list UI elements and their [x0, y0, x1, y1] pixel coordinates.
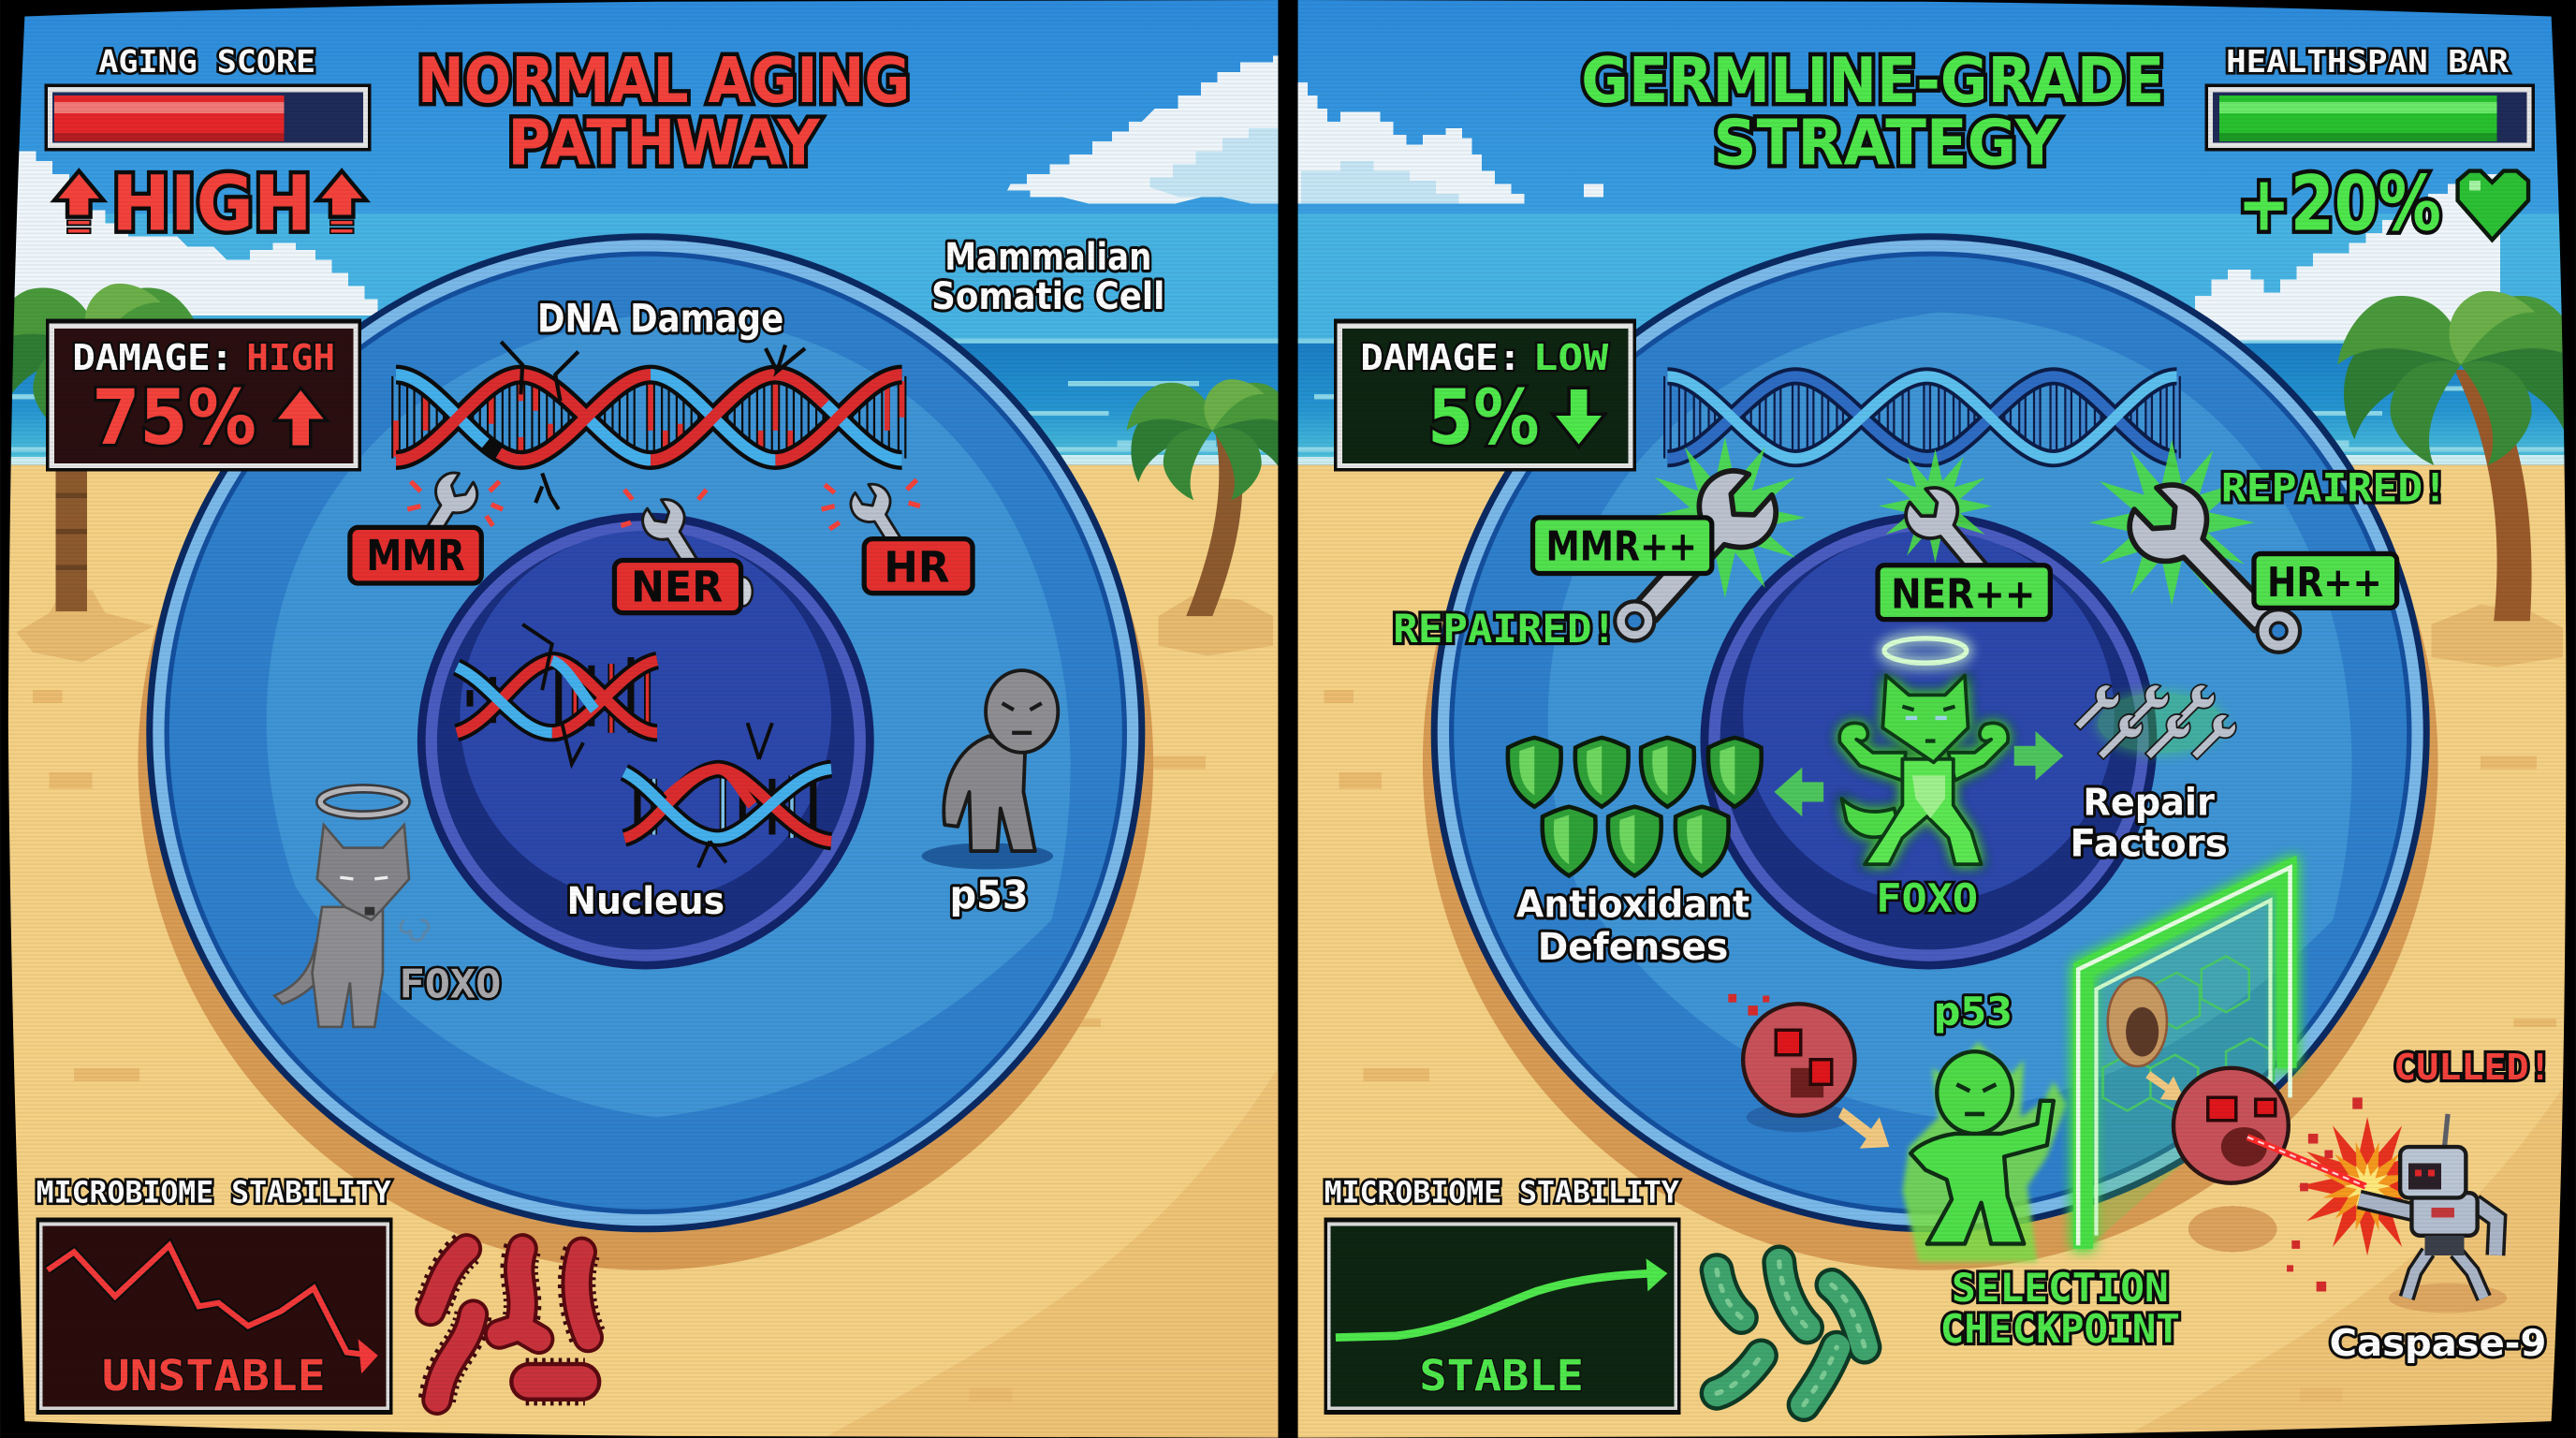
label: hr — [864, 539, 973, 594]
icon: left palm tree behind damage panel — [0, 269, 212, 662]
icon: arrow to antioxidants — [1774, 768, 1823, 816]
panel: somatic cell right — [1423, 233, 2438, 1270]
icon: wrench mmr strong — [1615, 458, 1790, 640]
character: caspase-9 robot — [2359, 1114, 2507, 1313]
icon: wrench ner weak — [621, 490, 753, 607]
label: selection checkpoint: CHECKPOINT — [1940, 1306, 2180, 1352]
chart: unstable microbiome: UNSTABLE — [102, 1351, 326, 1401]
heading: normal aging pathway: NORMAL AGING — [417, 44, 910, 117]
label: dna damage: DNA Damage — [537, 296, 783, 342]
icon: caspase laser beam — [2247, 1137, 2365, 1186]
label: foxo green: FOXO — [1876, 875, 1978, 921]
label: antioxidant defenses: Defenses — [1538, 925, 1728, 969]
heading: normal aging pathway — [417, 44, 910, 180]
high indicator with arrows — [54, 161, 366, 249]
nucleus right — [1701, 513, 2157, 969]
heading: normal aging pathway: PATHWAY — [507, 107, 820, 180]
icon: green repair burst ner — [1879, 449, 1992, 563]
icon: wrench hr weak — [822, 478, 924, 572]
label: repaired upper: REPAIRED! — [2221, 464, 2448, 510]
healthspan meter — [2204, 43, 2535, 151]
character: grey exhausted p53 — [922, 670, 1058, 869]
aging score meter: AGING SCORE — [98, 43, 315, 80]
damage panel right: DAMAGE: — [1360, 337, 1521, 379]
icon: selection checkpoint gate — [2078, 868, 2291, 1249]
icon: palm tree right of left cell — [1127, 379, 1279, 655]
label: ner: NER — [631, 562, 723, 611]
label: ner++: NER++ — [1891, 570, 2036, 618]
icon: culled cell ghost — [2108, 977, 2167, 1066]
shadow on sand below blocked cell — [2188, 1206, 2277, 1252]
damage panel right — [1334, 318, 1636, 472]
damage panel left: 75% — [92, 374, 256, 462]
icon: repair factor wrenches — [2069, 681, 2240, 765]
chart: broken dna inside nucleus lower — [624, 723, 831, 868]
icon: explosion — [2287, 1097, 2437, 1291]
heading: germline-grade strategy: GERMLINE-GRADE — [1581, 44, 2164, 117]
label: mammalian somatic cell: Mammalian — [944, 235, 1151, 279]
icon: palm tree at right edge — [2329, 273, 2576, 668]
healthspan meter: HEALTHSPAN BAR — [2226, 43, 2510, 80]
label: mammalian somatic cell: Somatic Cell — [931, 274, 1164, 318]
icon: blocked red cell — [2174, 1068, 2289, 1183]
heading: germline-grade strategy — [1581, 44, 2164, 180]
label: culled: CULLED! — [2393, 1047, 2552, 1089]
icon: wrench hr strong — [2116, 472, 2300, 653]
heading: germline-grade strategy: STRATEGY — [1714, 107, 2059, 180]
label: selection checkpoint — [1940, 1265, 2180, 1352]
damage panel right: 5% — [1427, 374, 1540, 462]
label: repaired lower: REPAIRED! — [1393, 606, 1617, 652]
icon: wrench ner strong — [1897, 479, 2011, 600]
label: selection checkpoint: SELECTION — [1952, 1265, 2169, 1311]
chart: broken dna inside nucleus upper — [457, 624, 657, 764]
character: green p53 guardian — [1902, 1042, 2067, 1262]
healthspan gain with heart: +20% — [2237, 161, 2441, 249]
label: p53 left: p53 — [949, 873, 1029, 918]
label: nucleus: Nucleus — [567, 879, 724, 923]
label: microbiome stability left: MICROBIOME STABILITY — [37, 1175, 391, 1211]
chart: damaged dna helix — [396, 342, 902, 509]
damage panel left: HIGH — [246, 337, 335, 379]
aging score meter — [44, 43, 372, 151]
label: antioxidant defenses: Antioxidant — [1516, 882, 1749, 926]
damage panel left: DAMAGE: — [72, 337, 233, 379]
panel: germline-grade beach background — [1298, 0, 2576, 1438]
icon: arrow to repair factors — [2014, 731, 2063, 781]
icon: damaged red cell — [1728, 994, 1854, 1132]
chart: stable microbiome — [1325, 1217, 1680, 1415]
icon: green repair burst hr — [2089, 440, 2255, 606]
damage panel left — [46, 318, 361, 472]
arrow: cell to checkpoint — [1838, 1108, 1889, 1149]
label: foxo grey: FOXO — [400, 961, 501, 1006]
label: repair factors — [2070, 780, 2228, 865]
icon: stable green bacteria — [1717, 1262, 1865, 1405]
label: hr: HR — [884, 542, 949, 592]
icon: antioxidant shields — [1508, 738, 1762, 875]
chart: unstable microbiome — [37, 1217, 393, 1415]
label: antioxidant defenses — [1516, 882, 1749, 969]
character: grey tired foxo wolf — [274, 788, 429, 1027]
character: green foxo fox — [1839, 638, 2008, 864]
label: microbiome stability right: MICROBIOME STABILITY — [1325, 1175, 1679, 1211]
icon: green repair burst mmr — [1645, 437, 1806, 598]
icon: unstable red bacteria — [431, 1249, 588, 1400]
nucleus left — [417, 513, 874, 969]
label: mmr: MMR — [366, 531, 465, 580]
panel: somatic cell left — [138, 233, 1153, 1270]
chart: repaired dna helix — [1667, 376, 2176, 459]
label: p53 green: p53 — [1934, 989, 2012, 1034]
label: repair factors: Factors — [2070, 821, 2228, 865]
panel: normal aging beach background — [0, 0, 1290, 1438]
damage panel right: LOW — [1532, 337, 1609, 379]
arrow: ghost to blocked cell — [2145, 1071, 2185, 1101]
label: hr++: HR++ — [2267, 559, 2382, 607]
label: caspase-9: Caspase-9 — [2330, 1322, 2546, 1365]
label: mammalian somatic cell — [931, 235, 1164, 318]
label: repair factors: Repair — [2083, 780, 2215, 824]
high indicator with arrows: HIGH — [111, 161, 313, 249]
label: mmr++: MMR++ — [1546, 522, 1697, 570]
icon: wrench mmr weak — [400, 466, 503, 566]
chart: stable microbiome: STABLE — [1419, 1351, 1584, 1401]
